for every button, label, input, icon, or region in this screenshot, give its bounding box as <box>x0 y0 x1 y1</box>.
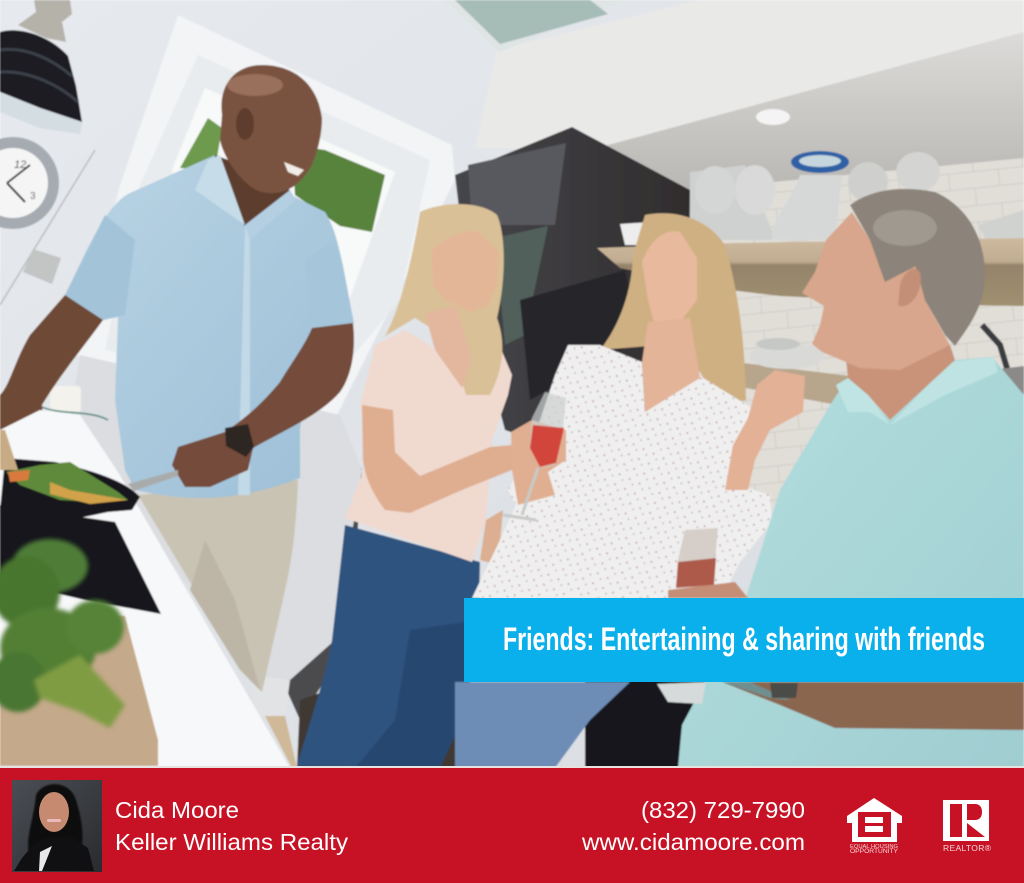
shirt <box>472 345 772 598</box>
glassware <box>690 151 1024 240</box>
wall under window <box>70 355 362 680</box>
jeans <box>455 682 630 768</box>
icon: realtor mark <box>943 800 992 853</box>
agent portrait <box>12 780 102 872</box>
forearm <box>722 682 1024 730</box>
hand under banner <box>668 582 748 598</box>
upper shelf <box>597 238 1024 306</box>
neck and chest <box>425 305 472 388</box>
agent company: Keller Williams Realty <box>115 829 349 855</box>
pendant lamp <box>0 0 82 134</box>
agent name: Cida Moore <box>115 797 239 823</box>
skylight <box>445 0 625 52</box>
banner: caption strip <box>464 598 1024 682</box>
second glass <box>676 528 718 585</box>
hair <box>850 189 985 346</box>
lower shelf <box>735 362 850 404</box>
clock: 3 <box>30 191 36 202</box>
clock <box>0 137 59 229</box>
head <box>220 65 322 193</box>
man in blue shirt <box>0 65 354 692</box>
glass base <box>657 682 706 704</box>
wristwatch <box>225 424 254 457</box>
footer band <box>0 766 1024 883</box>
counter and stove <box>0 410 290 768</box>
arm <box>362 405 512 513</box>
phone number: (832) 729-7990 <box>641 797 805 823</box>
icon: realtor mark: REALTOR® <box>943 843 992 853</box>
clock: 12 <box>14 159 26 171</box>
raised arm and hand <box>725 370 805 490</box>
man in teal shirt <box>657 189 1024 768</box>
garden through window <box>180 118 222 170</box>
shirt <box>65 155 354 498</box>
blouse <box>345 330 512 562</box>
oven and floor <box>282 468 362 720</box>
right kettle <box>982 325 1010 378</box>
woman in white shirt <box>455 213 805 768</box>
website: www.cidamoore.com <box>581 829 805 855</box>
fridge <box>455 127 690 470</box>
wine glass <box>503 392 566 520</box>
jeans <box>297 525 480 768</box>
broccoli <box>0 539 125 728</box>
hand holding glass <box>511 420 566 505</box>
shirt <box>678 357 1024 768</box>
neck <box>845 345 955 420</box>
trousers <box>138 480 298 692</box>
hair <box>600 213 746 405</box>
icon: equal housing opportunity <box>847 798 902 855</box>
window molding <box>75 15 455 425</box>
face <box>432 231 499 312</box>
left arm <box>0 295 103 438</box>
upper right wall <box>475 0 1024 150</box>
woman in pink blouse <box>297 204 512 768</box>
neck <box>642 318 700 412</box>
ear <box>898 269 921 306</box>
collar <box>836 378 890 425</box>
back wall tiles <box>690 158 1024 510</box>
hair back <box>385 204 504 395</box>
candle <box>50 386 81 413</box>
right wrist <box>480 510 503 565</box>
right arm and hand <box>172 323 354 487</box>
neck <box>210 155 290 226</box>
face <box>802 212 950 370</box>
face <box>642 231 697 326</box>
icon: equal housing opportunity: OPPORTUNITY <box>850 849 898 855</box>
pan with vegetables <box>0 430 178 520</box>
icon: equal housing opportunity: EQUAL HOUSING <box>850 844 898 850</box>
